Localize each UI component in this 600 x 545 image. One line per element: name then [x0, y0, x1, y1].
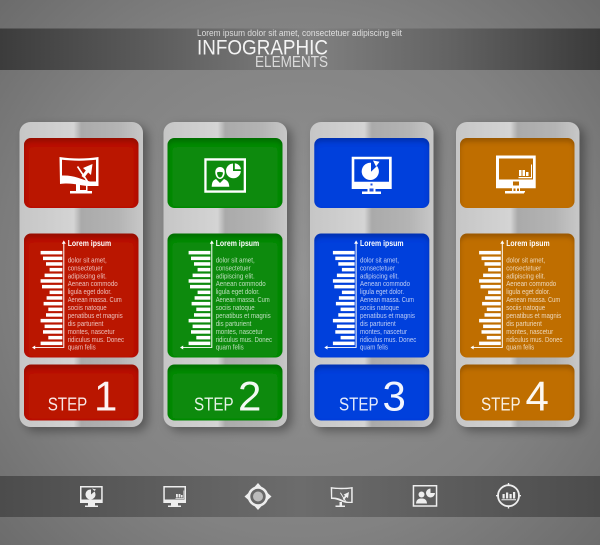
panel: step 2 icon — [168, 138, 282, 208]
step 3 card — [310, 122, 434, 427]
title: INFOGRAPHIC — [197, 36, 328, 60]
text block: dis parturient — [216, 319, 251, 328]
text block: Aenean massa. Cum — [506, 295, 560, 304]
icon: presenter with pie chart — [204, 158, 246, 193]
text block: ligula eget dolor. — [68, 287, 112, 296]
panel: step 1 text and chart — [24, 234, 138, 358]
panel: step 4 text and chart — [460, 234, 574, 358]
text block: Aenean massa. Cum — [360, 295, 414, 304]
text block: Aenean massa. Cum — [216, 295, 270, 304]
text block: ridiculus mus. Donec — [360, 335, 417, 344]
text block: sociis natoque — [360, 303, 399, 312]
step 2 card — [164, 122, 287, 427]
text block — [506, 238, 563, 352]
panel: step 1 label: 1 — [94, 373, 117, 420]
icon: monitor with pie — [80, 486, 103, 507]
text block: sociis natoque — [506, 303, 545, 312]
icon: monitor with pie chart — [352, 157, 392, 194]
text block — [216, 238, 272, 352]
text block: sociis natoque — [68, 303, 107, 312]
panel: step 4 icon — [460, 138, 574, 208]
text block: Lorem ipsum — [506, 238, 550, 248]
text block — [360, 238, 417, 352]
text block: montes, nascetur — [360, 327, 407, 336]
step 1 card — [20, 122, 143, 427]
bar chart — [470, 240, 504, 350]
text block: dis parturient — [360, 319, 396, 328]
text block: consectetuer — [68, 263, 103, 272]
text block: penatibus et magnis — [216, 311, 271, 320]
panel: step 3 icon — [314, 138, 429, 208]
icon: monitor with bar chart — [496, 156, 536, 194]
panel: step 3 label: 3 — [382, 373, 406, 420]
text block: adipiscing elit. — [506, 271, 545, 280]
text block: dis parturient — [68, 319, 103, 328]
text block: consectetuer — [506, 263, 542, 272]
step 4 card — [456, 122, 580, 427]
panel: step 2 text and chart — [168, 234, 282, 358]
panel: step 4 label: STEP — [481, 395, 521, 415]
text block: ridiculus mus. Donec — [506, 335, 563, 344]
text block: adipiscing elit. — [68, 271, 107, 280]
header subtitle: Lorem ipsum dolor sit amet, consectetuer adipiscing elit — [197, 28, 402, 39]
text block: Aenean commodo — [216, 279, 266, 288]
panel: step 2 label — [168, 364, 282, 420]
text block: dolor sit amet, — [216, 255, 255, 264]
bar chart — [324, 240, 358, 350]
text block: ridiculus mus. Donec — [216, 335, 272, 344]
panel: step 3 text and chart — [314, 234, 429, 358]
text block: montes, nascetur — [216, 327, 263, 336]
icon: curved monitor with arrow — [331, 487, 353, 507]
bar chart — [180, 240, 214, 350]
text block: quam felis — [68, 343, 96, 352]
panel: step 1 label — [24, 364, 138, 420]
text block: penatibus et magnis — [68, 311, 123, 320]
icon: target with bars — [496, 483, 521, 508]
subtitle: elements: ELEMENTS — [255, 54, 328, 71]
text block: dolor sit amet, — [506, 255, 545, 264]
text block: dolor sit amet, — [360, 255, 399, 264]
panel: step 3 label: STEP — [339, 395, 379, 415]
text block: ligula eget dolor. — [506, 287, 550, 296]
text block: Lorem ipsum — [360, 238, 404, 248]
panel: step 4 label: 4 — [526, 373, 549, 420]
header band — [0, 28, 600, 71]
panel: step 1 icon — [24, 138, 138, 208]
footer band — [0, 476, 600, 517]
text block: penatibus et magnis — [506, 311, 561, 320]
icon: curved monitor with arrow — [60, 157, 98, 194]
text block: Aenean commodo — [506, 279, 556, 288]
text block: dolor sit amet, — [68, 255, 107, 264]
text block: adipiscing elit. — [216, 271, 255, 280]
text block: adipiscing elit. — [360, 271, 399, 280]
text block: montes, nascetur — [68, 327, 115, 336]
text block: quam felis — [506, 343, 534, 352]
text block: quam felis — [216, 343, 244, 352]
text block: Lorem ipsum — [68, 238, 111, 248]
panel: step 4 label — [460, 364, 574, 420]
text block: dis parturient — [506, 319, 542, 328]
text block: penatibus et magnis — [360, 311, 415, 320]
text block: quam felis — [360, 343, 388, 352]
icon: presenter with pie — [413, 485, 437, 507]
panel: step 3 label — [314, 364, 429, 420]
panel: step 1 label: STEP — [48, 395, 87, 415]
text block: sociis natoque — [216, 303, 255, 312]
text block: consectetuer — [360, 263, 395, 272]
text block: Aenean massa. Cum — [68, 295, 122, 304]
bar chart — [32, 240, 66, 350]
text block: ligula eget dolor. — [216, 287, 260, 296]
text block: Aenean commodo — [68, 279, 118, 288]
text block: Lorem ipsum — [216, 238, 259, 248]
panel: step 2 label: 2 — [238, 373, 261, 420]
text block: consectetuer — [216, 263, 251, 272]
text block: Aenean commodo — [360, 279, 410, 288]
text block: ridiculus mus. Donec — [68, 335, 124, 344]
text block: montes, nascetur — [506, 327, 554, 336]
icon: circular arrows — [244, 483, 272, 510]
text block — [68, 238, 124, 352]
icon: monitor with bars — [163, 486, 186, 507]
panel: step 2 label: STEP — [194, 395, 234, 415]
text block: ligula eget dolor. — [360, 287, 404, 296]
